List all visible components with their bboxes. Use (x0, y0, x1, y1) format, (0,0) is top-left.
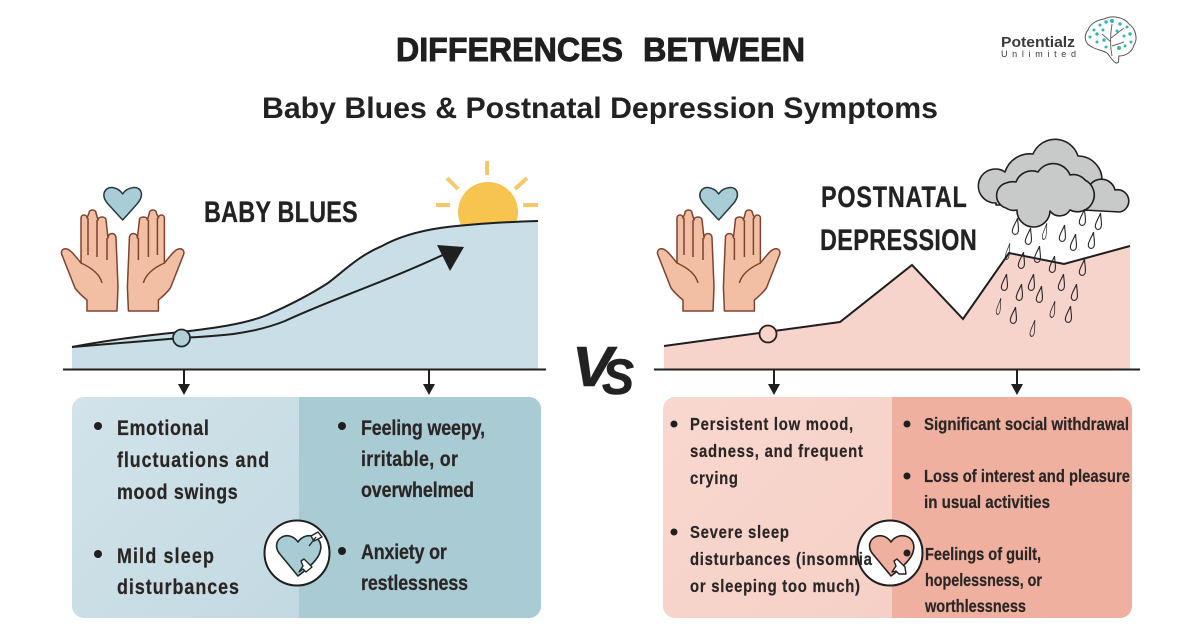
text: symptoms right column: in usual activities (924, 492, 1050, 512)
text: symptoms left column: Persistent low mood, (690, 415, 853, 434)
logo: Potentialz Unlimited (1001, 17, 1136, 63)
VS label: S (602, 349, 634, 405)
curve line (72, 221, 538, 347)
icon: sun (436, 161, 538, 242)
text: symptoms right column: overwhelmed (361, 479, 474, 502)
text: symptoms right column: hopelessness, or (925, 570, 1042, 590)
text: symptoms right column: Loss of interest and pleasure (924, 466, 1130, 486)
text: symptoms left column: disturbances (117, 576, 239, 599)
icon: heart badge (858, 520, 922, 586)
panel: Baby Blues symptoms (72, 397, 541, 618)
text: symptoms left column: disturbances (insomnia (690, 550, 873, 569)
area chart: rising curve (72, 221, 538, 369)
icon: hands with heart (61, 187, 184, 311)
logo: Potentialz Unlimited: Unlimited (1001, 49, 1076, 59)
VS label (572, 335, 634, 405)
text: symptoms right column: irritable, or (361, 448, 458, 471)
title (396, 31, 805, 68)
text: symptoms right column: Feeling weepy, (361, 417, 485, 440)
text: symptoms left column: or sleeping too much) (690, 577, 860, 596)
text: symptoms left column: fluctuations and (117, 449, 269, 472)
marker: start point (173, 330, 190, 346)
subtitle: Baby Blues & Postnatal Depression Symptoms (262, 92, 938, 125)
text: symptoms right column: Significant social withdrawal (924, 414, 1129, 434)
panel: Postnatal Depression symptoms (663, 397, 1132, 618)
text: symptoms left column: crying (690, 469, 738, 488)
icon: rain cloud (978, 139, 1129, 227)
text: symptoms left column (670, 415, 873, 596)
text: symptoms right column: restlessness (361, 572, 468, 595)
left column background (663, 397, 892, 618)
axis with arrows (63, 369, 546, 395)
axis with arrows (654, 369, 1140, 395)
text: symptoms left column: Emotional (117, 417, 209, 440)
VS label: V (572, 335, 617, 399)
fluctuating line (664, 246, 1130, 346)
area chart: fluctuating line (664, 246, 1130, 369)
marker: start point (760, 326, 776, 342)
icon: hands with heart (657, 187, 780, 311)
text: symptoms right column: Feelings of guilt, (925, 544, 1041, 564)
left column background (72, 397, 299, 618)
icon: heart badge (264, 520, 330, 586)
text: symptoms left column: Mild sleep (117, 545, 214, 568)
icon: rain drops (996, 209, 1104, 337)
panel: Baby Blues chart (61, 161, 546, 395)
title: BETWEEN (643, 31, 805, 68)
text: symptoms right column (338, 417, 485, 595)
text: symptoms left column: mood swings (117, 481, 238, 504)
text: symptoms right column: worthlessness (924, 596, 1026, 616)
heading: Postnatal Depression: POSTNATAL (821, 180, 967, 214)
right column background (892, 397, 1132, 618)
text: symptoms left column: Severe sleep (690, 523, 789, 542)
title: DIFFERENCES (396, 31, 623, 68)
text: symptoms left column: sadness, and frequent (690, 442, 864, 461)
heading: Postnatal Depression: DEPRESSION (820, 223, 977, 257)
text: symptoms left column (94, 417, 269, 599)
right column background (299, 397, 541, 618)
panel: Postnatal Depression chart (654, 139, 1140, 395)
arrow: upward trend (72, 245, 464, 347)
text: symptoms right column (904, 414, 1130, 616)
text: symptoms right column: Anxiety or (361, 541, 447, 564)
logo: Potentialz Unlimited: Potentialz (1001, 34, 1075, 51)
heading: Baby Blues: BABY BLUES (204, 195, 358, 229)
heading: Postnatal Depression (820, 180, 977, 257)
